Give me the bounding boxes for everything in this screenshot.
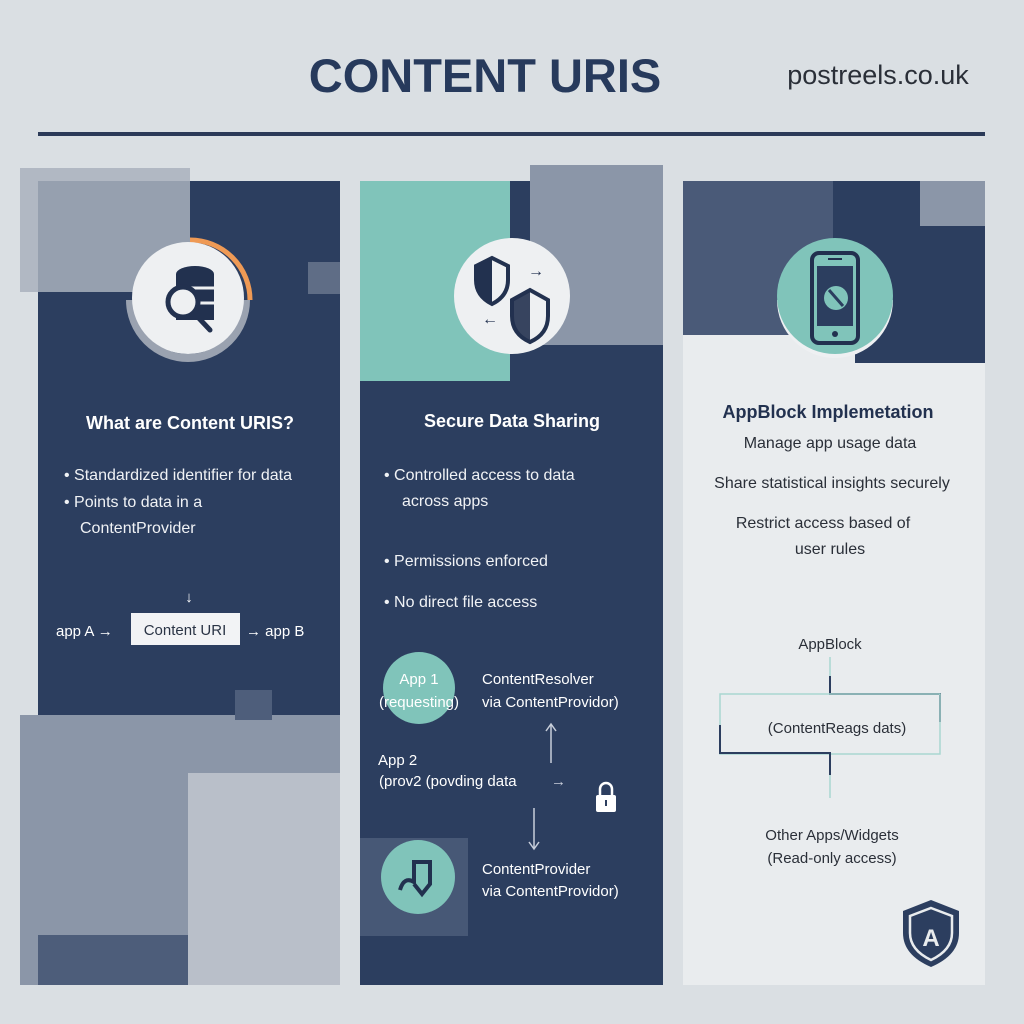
heading: What are Content URIS? [86, 413, 294, 433]
panel: what are content URIs [20, 168, 340, 985]
bullets [384, 467, 575, 611]
diagram: flow: ContentResolver [482, 671, 594, 688]
icon: lock [596, 783, 616, 812]
diagram: flow: → [551, 773, 566, 790]
icon: database search [130, 240, 250, 358]
diagram: app A to app B [56, 589, 304, 645]
diagram: flow [378, 652, 619, 914]
icon: shield A [903, 900, 959, 967]
title: CONTENT URIS [309, 49, 661, 102]
diagram: app A to app B: Content URI [144, 622, 226, 639]
icon: shields: → [528, 263, 544, 280]
diagram: flow: via ContentProvidor) [482, 694, 619, 711]
bullets: • Points to data in a [64, 494, 202, 511]
bullets: • No direct file access [384, 594, 537, 611]
diagram: AppBlock flow: (ContentReags dats) [768, 720, 906, 737]
icon: shield A: A [922, 925, 940, 952]
icon: shields: ← [482, 311, 498, 328]
bullets: across apps [402, 493, 488, 510]
diagram: app A to app B: app A → [56, 623, 113, 640]
bullets: • Controlled access to data [384, 467, 575, 484]
panel: AppBlock implementation [683, 181, 985, 985]
heading: AppBlock Implemetation [722, 402, 934, 422]
diagram: AppBlock flow: Other Apps/Widgets [765, 827, 899, 844]
diagram: flow: (prov2 (povding data [379, 773, 517, 790]
bullets: ContentProvider [80, 520, 196, 537]
panel: secure data sharing [360, 165, 663, 985]
bullets: • Standardized identifier for data [64, 467, 292, 484]
diagram: flow: App 2 [378, 752, 417, 769]
points: Restrict access based of [736, 515, 911, 532]
points: Manage app usage data [744, 435, 916, 452]
diagram: flow: ContentProvider [482, 861, 590, 878]
diagram: flow: via ContentProvidor) [482, 883, 619, 900]
heading: Secure Data Sharing [424, 411, 600, 431]
diagram: flow: App 1 [399, 671, 439, 688]
diagram: app A to app B: ↓ [185, 589, 193, 606]
icon: shields [454, 238, 570, 354]
site label: postreels.co.uk [787, 60, 969, 90]
points: Share statistical insights securely [714, 475, 950, 492]
diagram: AppBlock flow: (Read-only access) [767, 850, 897, 867]
diagram: AppBlock flow [720, 636, 940, 867]
diagram: app A to app B: → app B [246, 623, 304, 640]
bullets: • Permissions enforced [384, 553, 548, 570]
bullets [64, 467, 292, 537]
diagram: AppBlock flow: AppBlock [798, 636, 862, 653]
icon: phone [777, 238, 893, 358]
diagram: flow: (requesting) [379, 694, 459, 711]
points: user rules [795, 541, 865, 558]
points [714, 435, 950, 558]
